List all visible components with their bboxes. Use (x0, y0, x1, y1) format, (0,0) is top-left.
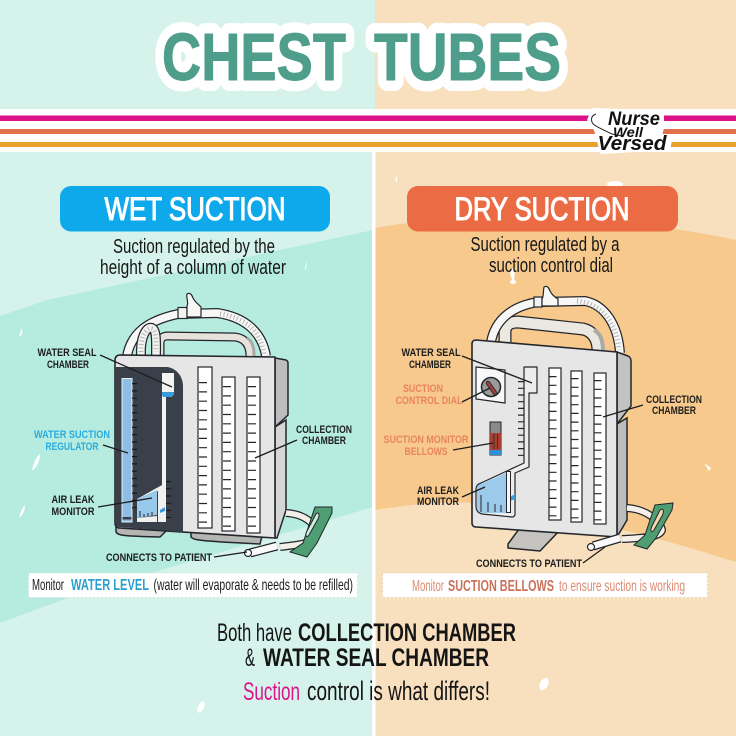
suction hose (127, 293, 266, 356)
callout: monitor suction bellows: Monitor (412, 578, 444, 595)
feet (116, 525, 262, 544)
heading: dry suction (407, 186, 678, 232)
label: collection chamber (603, 394, 702, 417)
wet suction labels and leaders (34, 347, 352, 564)
closing statement: COLLECTION CHAMBER (298, 619, 516, 647)
handle (160, 336, 254, 356)
side panel (275, 358, 288, 538)
body (115, 355, 275, 538)
water seal and air leak chamber (476, 367, 537, 517)
patient tube and clamp (244, 507, 332, 557)
right background panel (375, 0, 736, 736)
label: air leak monitor: MONITOR (52, 506, 95, 518)
dry suction drainage unit (472, 286, 673, 551)
label: water seal chamber: WATER SEAL (38, 347, 97, 359)
dry suction labels and leaders (384, 347, 702, 570)
dark water chambers panel (115, 367, 183, 532)
stand (508, 525, 562, 551)
decorative white flecks (19, 175, 711, 714)
callout: monitor water level: WATER LEVEL (71, 577, 149, 594)
side panel (617, 352, 631, 537)
suction hose (491, 286, 620, 353)
decorative white divider (372, 152, 376, 736)
label: water suction regulator: WATER SUCTION (34, 429, 110, 441)
callout: monitor suction bellows: SUCTION BELLOWS (448, 578, 554, 595)
label: collection chamber (255, 424, 352, 458)
callout: monitor suction bellows (382, 573, 708, 598)
label: air leak monitor (417, 485, 485, 508)
label: suction control dial: CONTROL DIAL (396, 395, 463, 407)
logo: Nurse Well Versed (587, 108, 672, 155)
label: collection chamber: CHAMBER (302, 435, 346, 447)
closing statement: Suction (243, 678, 300, 706)
title: TUBES (374, 20, 561, 95)
label: collection chamber: COLLECTION (646, 394, 702, 406)
wet suction description: height of a column of water (100, 257, 286, 279)
title: TUBES (374, 20, 561, 95)
label: air leak monitor: MONITOR (417, 496, 459, 508)
closing statement: & (245, 644, 255, 672)
label: connects to patient: CONNECTS TO PATIENT (106, 552, 212, 564)
handle (505, 322, 603, 351)
label: connects to patient (476, 547, 605, 570)
suction control dial (476, 367, 505, 403)
dry suction description (470, 234, 620, 277)
label: suction control dial: SUCTION (403, 383, 443, 395)
callout: monitor water level: Monitor (32, 577, 64, 594)
label: connects to patient: CONNECTS TO PATIENT (476, 558, 582, 570)
dry suction description: Suction regulated by a (470, 234, 620, 256)
closing statement: control is what differs! (307, 676, 490, 706)
wet suction description: Suction regulated by the (113, 236, 275, 258)
logo: Nurse Well Versed: Well (613, 124, 644, 140)
wet suction description (100, 236, 286, 279)
label: water seal chamber: CHAMBER (47, 359, 89, 371)
closing statement (217, 619, 516, 706)
collection columns (549, 368, 606, 524)
label: suction monitor bellows (384, 434, 493, 458)
patient tube and clamp (588, 503, 673, 550)
callout: monitor water level: (water will evaporate & needs to be refilled) (154, 577, 353, 594)
wet suction drainage unit (115, 293, 332, 557)
dry suction description: suction control dial (489, 255, 613, 277)
left background panel (0, 0, 375, 736)
collection columns (198, 367, 260, 533)
label: suction monitor bellows: BELLOWS (404, 446, 448, 458)
label: collection chamber: COLLECTION (296, 424, 352, 436)
logo: Nurse Well Versed: Versed (598, 133, 667, 155)
logo: Nurse Well Versed: Nurse (608, 109, 660, 130)
label: water suction regulator (34, 429, 128, 453)
label: water seal chamber: WATER SEAL (402, 347, 461, 359)
title: CHEST (162, 20, 346, 95)
suction monitor bellows (490, 422, 501, 455)
heading: wet suction: WET SUCTION (104, 191, 286, 227)
label: water seal chamber (38, 347, 172, 387)
label: air leak monitor (52, 494, 152, 518)
closing statement: WATER SEAL CHAMBER (263, 644, 489, 672)
heading: dry suction: DRY SUCTION (454, 191, 630, 227)
label: suction control dial (396, 383, 490, 407)
label: water suction regulator: REGULATOR (46, 441, 99, 453)
body (472, 340, 617, 537)
label: air leak monitor: AIR LEAK (52, 494, 95, 506)
callout: monitor water level (28, 573, 358, 598)
title: CHEST (162, 20, 346, 95)
label: collection chamber: CHAMBER (652, 405, 696, 417)
label: water seal chamber: CHAMBER (409, 359, 451, 371)
label: air leak monitor: AIR LEAK (417, 485, 459, 497)
heading: wet suction (60, 186, 330, 232)
closing statement: Both have (217, 619, 292, 647)
label: suction monitor bellows: SUCTION MONITOR (384, 434, 469, 446)
header stripes (0, 109, 736, 152)
label: water seal chamber (402, 347, 532, 383)
title (162, 20, 561, 95)
